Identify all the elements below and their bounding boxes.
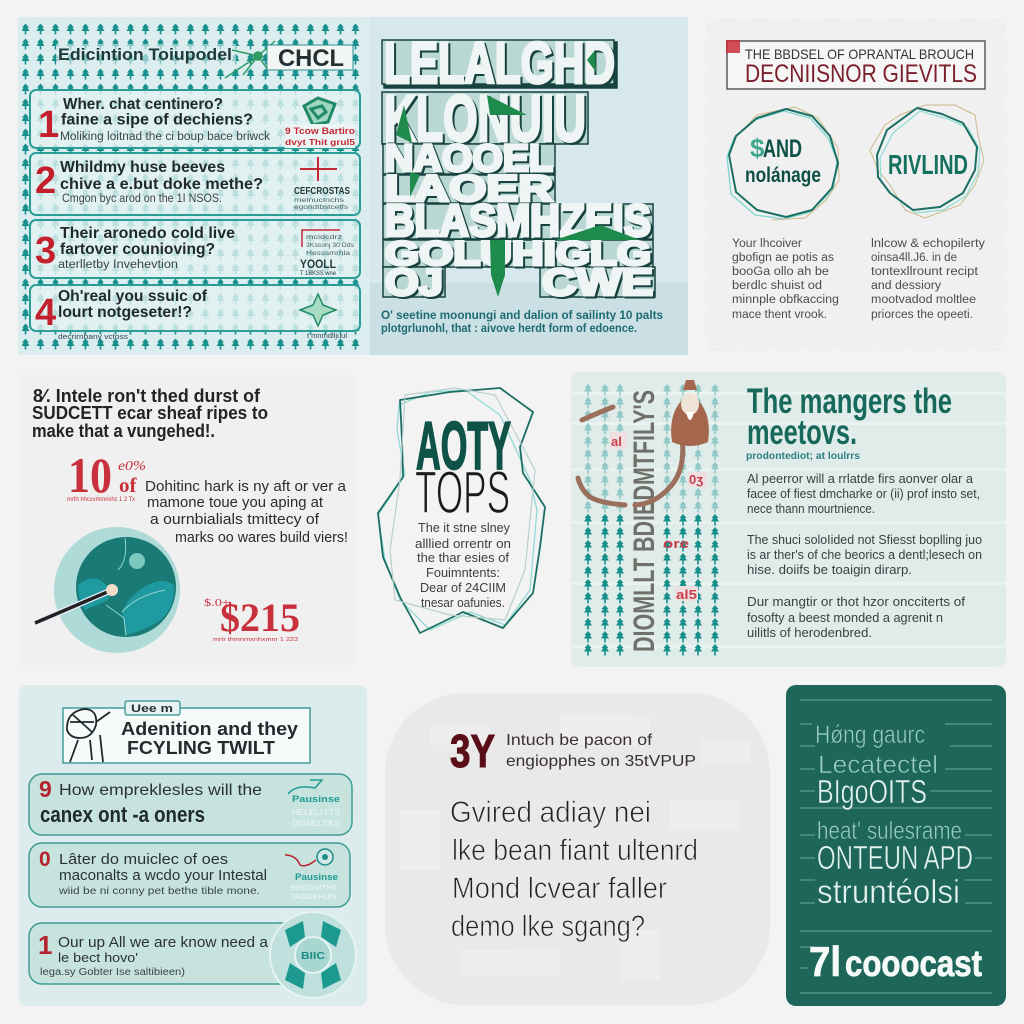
paragraph 1: facee of fiest dmcharke or (ii) prof insto set,: [747, 487, 980, 501]
green accents: [396, 50, 640, 297]
question 4: Oh'real you ssuic of: [58, 288, 208, 305]
paragraph 1: [747, 472, 980, 516]
label: CHCL: CHCL: [278, 45, 344, 72]
subheading: prodontediot; at loulrrs: [746, 451, 860, 462]
paragraph 2: is ar ther's of che beorics a dentl;lesech on: [747, 548, 982, 562]
heading: [32, 386, 268, 441]
paragraph 1: Al peerror will a rrlatde firs aonver olar a: [747, 472, 973, 486]
question 3: aterlletby Invehevtion: [58, 259, 178, 271]
red note: dvyt Thit grul5: [285, 137, 355, 147]
right column text: [871, 238, 985, 321]
figure illustration: [671, 380, 709, 446]
handwritten lines: Mond lcvear faller: [452, 872, 667, 905]
list item 2: [29, 843, 350, 907]
lettering: LAOER: [385, 168, 553, 209]
badge: AND: nolánage: [745, 164, 821, 187]
list item 1: [29, 774, 352, 835]
paragraph 2: [747, 533, 982, 577]
question 4: 4: [35, 292, 56, 334]
side label: mcidcdrz: [306, 234, 342, 241]
card text: Hǿng gaurc: [815, 721, 925, 749]
card text: heat' sulesrame: [817, 817, 962, 845]
left column text: mace thent vrook.: [732, 309, 827, 321]
lettering: KLONUIU: [384, 81, 586, 155]
list item 1: How empreklesles will the: [59, 782, 262, 799]
paragraph 2: hise. doiifs be toaigin dirarp.: [747, 563, 912, 577]
panel: dark green card: struntéolsi: [817, 873, 960, 910]
right column text: lnlcow & echopilerty: [871, 238, 985, 250]
footer small text: [58, 333, 347, 341]
red labels: al: [611, 434, 622, 449]
card text: Lecatectel: [818, 751, 938, 779]
heading strip: Edicintion Toiupodel: [58, 45, 232, 64]
icon: swoosh label: DIGMLLTIKS: [292, 819, 340, 828]
text block: alllied orrentr on: [415, 537, 511, 551]
text block: mamone toue you aping at: [147, 495, 323, 511]
question 3: [30, 220, 360, 278]
right column text: mootvadod moltlee: [871, 294, 976, 306]
question 1: [30, 90, 360, 148]
panel: dark green card: BIgoOITS: [817, 773, 927, 810]
panel: dark green card: [786, 685, 1006, 1006]
icon: red cross: [300, 157, 337, 181]
badge: RIVLIND: RIVLIND: [888, 149, 968, 180]
text block: a ournbialials tmittecy of: [150, 512, 320, 528]
icon: eye with red wave: Pausinse: [295, 872, 338, 882]
panel: handwritten note: [385, 693, 770, 1005]
stat: 10: [67, 447, 146, 503]
heading: 3Y: [450, 725, 495, 777]
icon: eye with red wave: [285, 849, 338, 901]
side label: YOOLL: [300, 257, 336, 271]
heading: Intuch be pacon of: [506, 732, 653, 749]
icon: green connector: [225, 41, 275, 78]
header box: [726, 40, 985, 89]
paragraph 3: fosofty a beest monded a agrenit n: [747, 611, 943, 625]
icon: eye with red wave: BESIOUITHS: [291, 883, 337, 892]
panel: decision questions: [18, 17, 370, 355]
icon: green hexagon: [304, 98, 335, 125]
backdrop blocks: [400, 715, 750, 980]
ruled lines: [800, 700, 992, 993]
panel: AOTY tops blob: [378, 388, 545, 633]
lettering: OJ: [385, 262, 443, 304]
list item 2: Lâter do muiclec of oes: [59, 851, 228, 868]
question 2: [30, 153, 360, 215]
header box: DECNIISNOR GIEVITLS: [745, 60, 977, 88]
header box: FCYLING TWILT: [127, 738, 275, 758]
left column text: gbofign ae potis as: [732, 252, 834, 264]
list item 3: [29, 912, 356, 998]
question 2: Cmgon byc arod on the 1I NSOS.: [62, 193, 222, 205]
left column text: Your lhcoiver: [732, 238, 802, 250]
text block: The it stne slney: [418, 521, 511, 535]
footer small text: t mnmdlljuul: [307, 333, 347, 340]
footer small text: decrirnbany vctoss: [58, 334, 129, 341]
side label: CEFCROSTAS: [294, 186, 350, 197]
question 4: lourt notgeseter!?: [58, 304, 192, 321]
text block: [415, 521, 511, 610]
stat: 10: of: [119, 473, 138, 497]
panel: AOTY tops blob: AOTY: [416, 408, 511, 484]
left column text: minnple obfkaccing: [732, 294, 839, 306]
icon: red bracket: [302, 230, 340, 247]
text block: tnesar oafunies.: [421, 596, 505, 610]
red labels: [610, 432, 707, 602]
icon: swoosh label: [288, 780, 340, 828]
question 3: 3: [35, 230, 56, 272]
brand line: [809, 938, 982, 985]
description: O' seetine moonungi and dalion of sailinty 10 palts: [381, 308, 663, 322]
red note: [285, 124, 355, 148]
badge: AND: [727, 107, 839, 220]
question 3: fartover counioving?: [60, 241, 215, 258]
heading: [450, 725, 696, 777]
paragraph 3: Dur mangtir or thot hzor oncciterts of: [747, 595, 966, 609]
side label: Hesssmrhla: [306, 250, 350, 257]
header box: Uee m: [131, 703, 173, 715]
badge: AND: AND: [763, 135, 802, 163]
stat: 215: $.0+: [204, 597, 230, 609]
paragraph 3: [747, 595, 966, 640]
side label: 3Ksconj 30 Dds: [306, 242, 355, 249]
side label: [294, 186, 350, 211]
tree pattern background: [22, 22, 367, 352]
list item 2: maconalts a wcdo your Intestal: [59, 867, 267, 884]
stat: 10: mrfrt hhcxxmmnxhz 1 2 Tx: [67, 497, 135, 503]
heading: 8⁄. Intele ron't thed durst of: [33, 386, 261, 406]
icon: green star: [300, 294, 336, 326]
header box: THE BBDSEL OF OPRANTAL BROUCH: [745, 46, 974, 62]
list item 1: 9: [39, 776, 52, 802]
stat: 10: e0%: [118, 459, 146, 474]
description: [381, 308, 663, 335]
right column text: oinsa4ll.J6. in de: [871, 252, 957, 264]
left column text: berdlc shuist od: [732, 280, 822, 292]
panel: statistics: [18, 375, 355, 665]
text block: Dear of 24CIIM: [420, 581, 506, 595]
icon: eye with red wave: TAGGEHUIS: [291, 892, 337, 901]
panel: AOTY tops blob: TOPS: [415, 459, 510, 526]
side label: egondtbstcetfs: [294, 204, 349, 211]
text block: [145, 479, 348, 546]
question 4: [30, 285, 360, 334]
red labels: 0ʒ: [689, 472, 703, 487]
red labels: al5: [676, 587, 697, 602]
list item 2: wiid be ni conny pet bethe tible mone.: [58, 885, 260, 897]
red labels: ore: [663, 536, 689, 551]
lettering: CWE: [542, 262, 653, 304]
text block: Dohitinc hark is ny aft or ver a: [145, 479, 347, 495]
paragraph 2: The shuci soloIided not Sfiesst boplling juo: [747, 533, 982, 547]
list item 3: le bect hovo': [58, 950, 138, 965]
header box: Adenition and they: [121, 719, 298, 739]
tile backing: [382, 40, 655, 297]
brown arc: [578, 407, 683, 505]
heading: meetovs.: [747, 413, 857, 452]
blob outlines: [378, 388, 545, 633]
question 1: 1: [38, 104, 59, 146]
question 2: 2: [35, 160, 56, 202]
red note: 9 Tcow Bartiro: [285, 126, 355, 137]
stat: 215: mrtr thmnrnxnhxmnr 1 223: [213, 637, 298, 643]
question 2: chive a e.but doke methe?: [60, 176, 263, 193]
card text: [815, 721, 962, 845]
handwritten lines: lke bean fiant ultenrd: [452, 834, 698, 867]
icon: globe with pointer: [35, 527, 180, 653]
text block: the thar esies of: [417, 551, 510, 565]
right column text: and dessiory: [871, 280, 941, 292]
badge: RIVLIND: [870, 105, 984, 218]
lettering: LELALGHD: [384, 31, 615, 96]
lettering: [384, 31, 653, 304]
icon: wheel: BIIC: [301, 951, 325, 962]
right column text: tontexllrount recipt: [871, 266, 979, 278]
lettering: GOLUHIGLG: [385, 235, 651, 273]
list item 3: 1: [38, 930, 52, 960]
left column text: [732, 238, 839, 321]
list item 3: Our up All we are know need a: [58, 934, 269, 951]
side label: melnuclnchs: [294, 197, 345, 204]
question 1: Wher. chat centinero?: [63, 96, 223, 113]
panel: the mangers: [571, 372, 1006, 667]
handwritten lines: Gvired adiay nei: [450, 796, 651, 829]
text block: Fouimntents:: [426, 566, 500, 580]
heading: SUDCETT ecar sheaf ripes to: [32, 403, 268, 423]
lettering: BLASMHZEIS: [385, 195, 651, 246]
badge: AND: $: [750, 133, 765, 163]
heading: The mangers the: [747, 382, 952, 421]
question 2: Whildmy huse beeves: [60, 159, 225, 176]
handwritten lines: demo lke sgang?: [451, 910, 645, 943]
brand line: 7l: [809, 938, 841, 985]
side label: T 1BKSS wne: [300, 271, 337, 277]
text block: marks oo wares build viers!: [175, 530, 348, 546]
header box: [63, 701, 310, 763]
tree columns: [580, 383, 722, 656]
list item 1: canex ont -a oners: [40, 802, 205, 827]
stat: 10: 10: [68, 447, 112, 503]
list item 3: lega.sy Gobter Ise saltibieen): [40, 967, 185, 978]
side label: [300, 234, 355, 277]
heading: make that a vungehed!.: [32, 421, 215, 441]
handwritten lines: [450, 796, 698, 943]
icon: wheel: [270, 912, 356, 998]
panel: two options: [706, 20, 1006, 350]
lettering: NAOOEL: [385, 138, 553, 180]
panel: big title panel background: [18, 17, 688, 355]
stat: 215: $215: [220, 595, 300, 640]
illustration: sketch head: [67, 709, 110, 762]
paragraph 1: nece thann mourtnience.: [747, 502, 875, 516]
list item 2: 0: [39, 848, 51, 871]
right column text: priorces the opeeti.: [871, 309, 973, 321]
heading: engiopphes on 35tVPUP: [506, 753, 696, 770]
brand line: cooocast: [845, 943, 982, 984]
stripes: [571, 392, 1006, 648]
vertical lettering: DIOMLLT BDIEDMTFILY'S: [628, 390, 661, 652]
question 1: faine a sipe of dechiens?: [61, 112, 253, 128]
icon: swoosh label: HELELI LTS: [292, 808, 340, 817]
paragraph 3: uilitls of herodenbred.: [747, 626, 872, 640]
icon: swoosh label: Pausinse: [292, 794, 340, 804]
heading: [747, 382, 952, 452]
question 1: Moliking loitnad the ci boup bace briwck: [60, 131, 270, 143]
block lettering title: [381, 31, 663, 335]
question 3: Their aronedo cold live: [60, 225, 235, 242]
description: plotgrlunohl, that : aivove herdt form of edoence.: [381, 321, 637, 335]
left column text: booGa ollo ah be: [732, 266, 829, 278]
panel: adenition list: [19, 685, 367, 1006]
